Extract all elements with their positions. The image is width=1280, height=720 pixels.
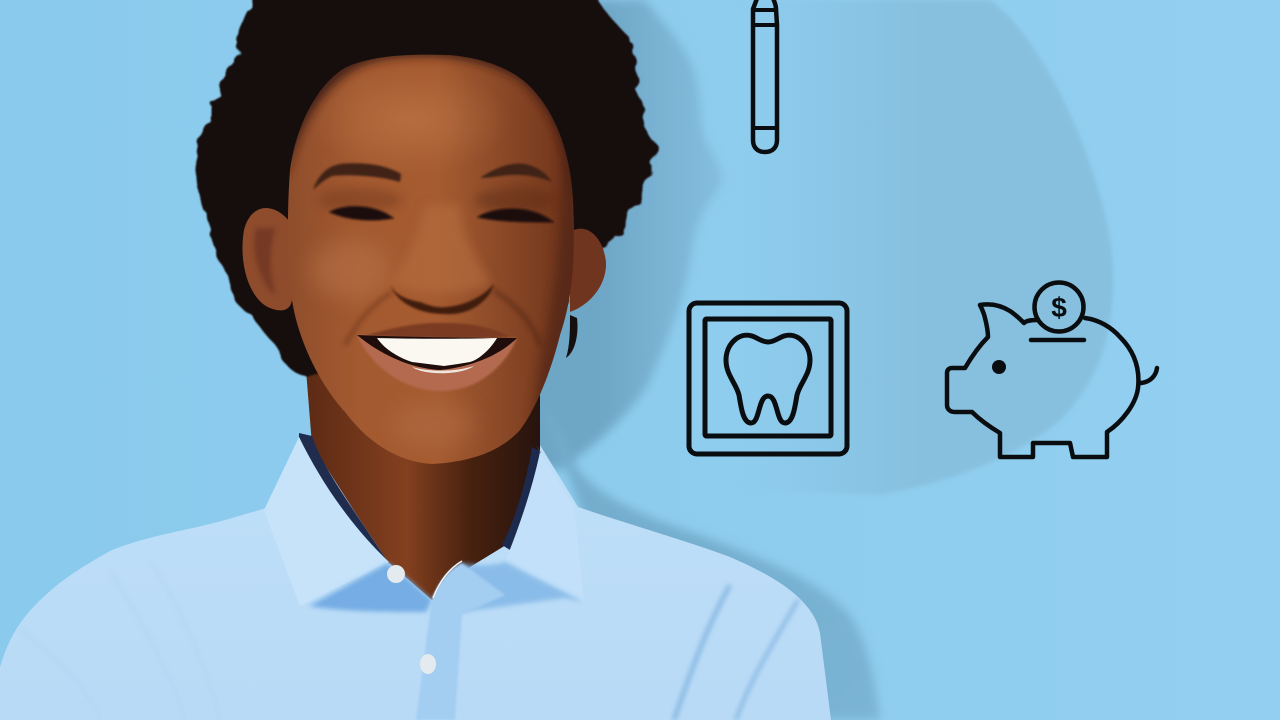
lower lip and mouth xyxy=(357,335,517,391)
shirt collar left xyxy=(264,437,389,606)
mouth corners and interior xyxy=(357,335,517,370)
head shadow xyxy=(520,0,722,470)
collar inner shadow right xyxy=(502,447,541,550)
collar button xyxy=(387,565,405,583)
collar inner shadow left xyxy=(299,433,388,562)
icon: tooth x-ray xyxy=(689,303,847,454)
right collar fold xyxy=(460,562,584,612)
nose base shadow xyxy=(390,284,494,314)
coin slot xyxy=(1031,338,1084,342)
shirt collar right xyxy=(505,445,584,602)
shirt folds right xyxy=(674,585,798,720)
left cheek highlight xyxy=(310,243,384,297)
forehead highlight xyxy=(348,89,483,152)
coin xyxy=(1034,282,1084,332)
placket xyxy=(416,563,505,720)
icon: toothbrush handle xyxy=(753,0,777,152)
right smile line xyxy=(494,290,540,345)
hairline shadow xyxy=(290,54,570,177)
pig tail xyxy=(1141,368,1157,383)
face shading xyxy=(285,40,580,449)
right side shadow xyxy=(530,146,574,414)
shirt folds left xyxy=(20,560,220,720)
right hair sliver xyxy=(566,315,578,358)
upper lip xyxy=(365,323,510,339)
nose highlight xyxy=(394,205,490,292)
upper teeth xyxy=(377,338,497,366)
eye socket shadows xyxy=(318,188,402,212)
face xyxy=(288,55,574,464)
left eyebrow xyxy=(313,163,401,190)
left smile line xyxy=(345,292,392,345)
hair xyxy=(196,0,659,378)
icon: piggy bank with coin xyxy=(947,282,1157,457)
neck xyxy=(306,370,540,600)
right eye xyxy=(478,209,553,222)
shirt button xyxy=(420,654,436,674)
right ear xyxy=(570,229,606,312)
person xyxy=(0,0,831,720)
inner shirt left xyxy=(309,563,432,612)
right eyebrow xyxy=(480,164,552,182)
pig body xyxy=(947,304,1138,457)
chin highlight xyxy=(403,410,467,440)
left ear inner xyxy=(254,228,276,296)
dollar sign: $ xyxy=(1051,292,1067,323)
placket edge highlight xyxy=(433,561,462,598)
left eye xyxy=(330,207,393,220)
body shadow xyxy=(540,400,880,720)
large soft background shadow xyxy=(740,0,1113,495)
lower teeth xyxy=(412,366,474,373)
shirt xyxy=(0,437,831,720)
left ear xyxy=(242,208,292,310)
pig eye xyxy=(992,360,1006,374)
